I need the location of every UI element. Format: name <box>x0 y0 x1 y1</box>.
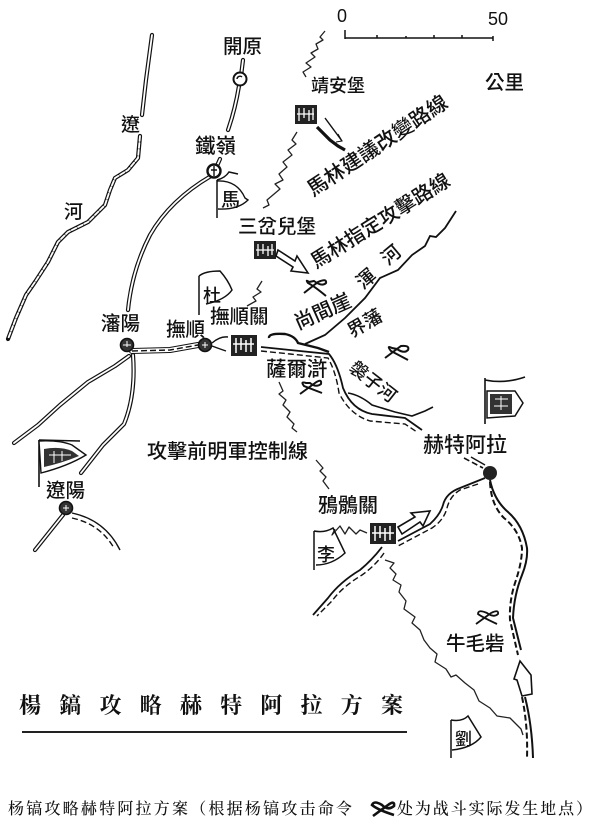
flag: Li <box>314 528 345 570</box>
river: Hun river <box>305 211 456 344</box>
battle marker: Sarhu <box>300 381 322 394</box>
caption <box>8 799 592 818</box>
city marker: Fushun <box>198 338 212 352</box>
label: Liao: 遼 <box>121 114 140 136</box>
flag: Ma <box>217 172 248 218</box>
arrow: ordered route <box>276 250 308 273</box>
road: Kaiyuan to Tieling <box>216 60 243 168</box>
battle marker: Jiefan <box>385 346 408 360</box>
city marker: Shenyang <box>120 338 134 352</box>
fort: Fushun pass <box>231 335 257 356</box>
control line: north <box>303 31 325 77</box>
label: Shangjianya: 尚間崖 <box>291 289 355 335</box>
city marker: Liaoyang <box>60 502 72 514</box>
control line: above pass <box>316 460 329 489</box>
caption: 杨镐攻略赫特阿拉方案（根据杨镐攻击命令 <box>8 799 352 818</box>
label: kilometre unit: 公里 <box>485 72 524 94</box>
caption: 处为战斗实际发生地点） <box>397 799 592 818</box>
label: Hun river second character: 河 <box>377 241 406 270</box>
label: Niumao stockade: 牛毛砦 <box>446 633 505 655</box>
scale bar <box>337 6 508 41</box>
title underline <box>22 731 407 733</box>
label: Hun river: 渾 <box>352 265 381 294</box>
fort: Jing'an <box>295 105 317 124</box>
fort: Sancha <box>254 241 276 259</box>
city marker: Hetuala <box>483 466 497 480</box>
scale bar: 50 <box>488 9 508 29</box>
control line: north central <box>263 132 297 208</box>
road: Hetuala to fort <box>398 457 485 546</box>
battle marker: Niumao <box>476 611 498 624</box>
label: Liaoyang: 遼陽 <box>46 480 85 502</box>
river: Jiazi river <box>348 393 433 416</box>
road: Shenyang to Liaoyang <box>81 355 134 473</box>
arrow: proposed route <box>317 118 345 150</box>
label: control line: 攻擊前明軍控制線 <box>147 440 308 463</box>
flag: Ma: 馬 <box>221 190 240 211</box>
label: Jiazi river: 褩子河 <box>346 357 400 406</box>
control line: Fushun pass <box>247 281 262 306</box>
flag: Li: 李 <box>317 545 335 565</box>
control line: Li flag to fort <box>332 526 367 535</box>
control line: below Sarhu <box>279 382 297 432</box>
road: Hetuala south <box>490 480 533 758</box>
control line: south <box>385 560 523 735</box>
label: Jing'an fort: 靖安堡 <box>311 76 365 96</box>
label: Sancha fort: 三岔兒堡 <box>238 216 316 238</box>
scale bar: 0 <box>337 6 347 26</box>
label: river: 河 <box>64 201 83 223</box>
fort: Yahu pass <box>370 523 396 544</box>
city marker: Kaiyuan <box>234 72 246 86</box>
flag: Liu <box>451 716 481 758</box>
label: Fushun: 撫順 <box>166 319 206 341</box>
place labels <box>46 36 524 655</box>
road: Shenyang southwest <box>14 356 129 443</box>
city marker: Tieling <box>208 164 220 178</box>
flag: Du: 杜 <box>203 286 221 306</box>
road: Shenyang to Fushun <box>132 337 228 351</box>
label: Jiefan: 界藩 <box>344 305 386 341</box>
flag: Liu: 劉 <box>455 730 472 749</box>
flag: Liaoyang banner <box>39 440 86 487</box>
arrow: Yahu pass route <box>398 511 430 534</box>
label: Yahu pass: 鴉鶻關 <box>318 494 378 517</box>
title: 楊鎬攻略赫特阿拉方案 <box>19 693 403 718</box>
label: ordered route: 馬林指定攻擊路線 <box>306 169 454 273</box>
river: Liao river <box>8 35 152 339</box>
label: Fushun pass: 撫順關 <box>210 306 269 328</box>
label: Kaiyuan: 開原 <box>223 36 262 58</box>
flag: Du <box>199 271 232 315</box>
label: Tieling: 鐵嶺 <box>195 135 236 158</box>
label: Sarhu: 薩爾滸 <box>266 358 328 381</box>
road: Tieling to Shenyang <box>128 176 211 310</box>
road: southwest of pass <box>313 547 384 616</box>
road: Sarhu to Hetuala <box>261 334 422 432</box>
flag: Hetuala banner <box>485 377 525 424</box>
arrow: south route <box>514 661 532 696</box>
label: Shenyang: 瀋陽 <box>101 312 140 335</box>
label: proposed route: 馬林建議改變路線 <box>303 91 452 201</box>
icon: crossed swords legend <box>372 802 394 816</box>
battle marker: Shangjianya <box>304 280 326 296</box>
road: south of Liaoyang <box>35 513 120 550</box>
label: Hetuala: 赫特阿拉 <box>423 434 507 457</box>
